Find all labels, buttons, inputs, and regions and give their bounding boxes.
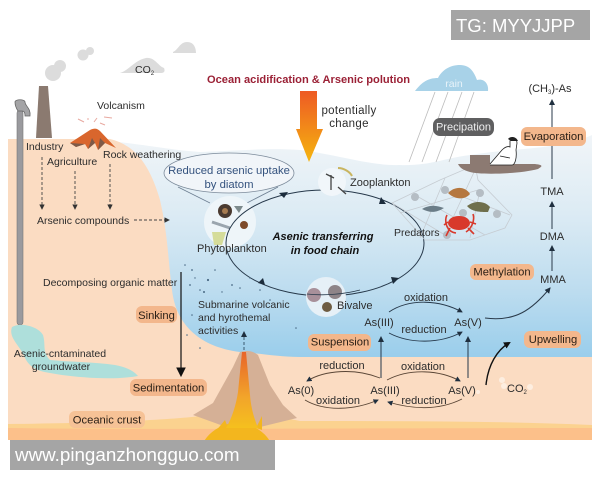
cycle centre title: in food chain xyxy=(291,245,359,257)
smoke clouds xyxy=(45,42,196,81)
CO2 label top: 2 xyxy=(151,71,155,77)
watermark top: TG: MYYJJPP xyxy=(456,15,575,36)
sediment arsenic cycle: oxidation xyxy=(401,361,445,373)
land source labels: Agriculture xyxy=(47,156,97,168)
sediment arsenic cycle: reduction xyxy=(319,360,365,372)
land source labels: Industry xyxy=(26,141,64,153)
Upwelling pill: Upwelling xyxy=(529,334,577,346)
rain cloud xyxy=(415,65,488,91)
volcano on land xyxy=(70,117,116,150)
ocean water xyxy=(100,135,592,360)
watermark top xyxy=(451,10,590,40)
sinking arrowhead xyxy=(177,368,185,376)
Sedimentation pill xyxy=(130,379,207,396)
rain lines xyxy=(409,92,474,162)
CO2 label lower: 2 xyxy=(524,390,528,396)
land source labels xyxy=(26,141,181,227)
submarine label: activities xyxy=(198,325,238,337)
diatom callout xyxy=(164,153,294,204)
methyl species: (CH xyxy=(528,83,548,95)
Precipation pill: Precipation xyxy=(436,122,491,134)
sediment arsenic cycle: As(III) xyxy=(370,385,400,397)
zooplankton icon xyxy=(318,168,352,196)
watermark bottom xyxy=(10,440,275,470)
groundwater plume xyxy=(11,325,138,378)
cycle centre title: Asenic transferring xyxy=(273,231,373,243)
Suspension pill xyxy=(308,334,371,351)
Suspension pill: Suspension xyxy=(311,336,369,348)
potentially change text: change xyxy=(329,118,369,130)
land source labels: Rock weathering xyxy=(103,149,181,161)
Zooplankton label: Zooplankton xyxy=(350,177,411,189)
orange down arrow xyxy=(296,91,323,162)
rising arrows xyxy=(381,337,509,385)
rain cloud: rain xyxy=(445,78,463,90)
Phytoplankton label: Phytoplankton xyxy=(197,243,267,255)
sediment pale smudges xyxy=(476,377,533,394)
Upwelling pill xyxy=(524,331,581,348)
Decomposing label: Decomposing organic matter xyxy=(43,277,178,289)
vent dashed arrow xyxy=(243,332,245,350)
land and sea floor xyxy=(8,139,592,440)
food chain cycle xyxy=(226,190,424,296)
sediment arsenic cycle: oxidation xyxy=(316,395,360,407)
diatom callout: by diatom xyxy=(205,179,253,191)
methyl species: DMA xyxy=(540,231,565,243)
Methylation pill xyxy=(470,264,534,280)
Oceanic crust pill: Oceanic crust xyxy=(73,414,142,426)
methyl species xyxy=(528,83,572,286)
Oceanic crust pill xyxy=(69,411,145,428)
potentially change text: potentially xyxy=(321,105,377,117)
net knots xyxy=(411,186,501,239)
sediment arsenic cycle: As(0) xyxy=(288,385,314,397)
fish and crab xyxy=(422,188,490,236)
sediment arsenic cycle: As(V) xyxy=(448,385,476,397)
land source labels: Arsenic compounds xyxy=(37,215,129,227)
CO2 label top: CO xyxy=(135,64,151,76)
diatom callout: Reduced arsenic uptake xyxy=(168,165,290,177)
submarine label: and hyrothemal xyxy=(198,312,270,324)
Evaporation pill xyxy=(521,127,586,146)
groundwater label: groundwater xyxy=(32,361,91,373)
sediment arsenic cycle: reduction xyxy=(401,395,447,407)
methyl species: TMA xyxy=(540,186,564,198)
CO2 label lower: CO xyxy=(507,383,524,395)
water arsenic cycle: oxidation xyxy=(404,292,448,304)
sinking arrow xyxy=(180,272,182,374)
methyl species: )-As xyxy=(551,83,572,95)
person in boat xyxy=(490,137,518,165)
phytoplankton icon xyxy=(204,196,256,248)
title: Ocean acidification & Arsenic polution xyxy=(207,74,410,86)
groundwater label: Asenic-cntaminated xyxy=(14,348,106,360)
net xyxy=(392,165,512,240)
Sinking pill xyxy=(136,306,177,323)
chimney xyxy=(36,86,52,138)
water arsenic cycle xyxy=(364,292,482,341)
methyl species: 3 xyxy=(548,90,552,96)
crust layers xyxy=(8,415,592,440)
dashed arrows to arsenic compounds xyxy=(42,157,169,220)
submarine label: Submarine volcanic xyxy=(198,299,290,311)
Methylation pill: Methylation xyxy=(473,266,531,278)
methyl species: MMA xyxy=(540,274,566,286)
cycle arrowheads xyxy=(258,192,399,285)
water arsenic cycle: As(V) xyxy=(454,317,482,329)
Precipation pill xyxy=(433,118,494,136)
particles xyxy=(184,264,297,349)
sediment arsenic cycle xyxy=(288,360,476,408)
watermark bottom: www.pinganzhongguo.com xyxy=(14,444,239,465)
Bivalve label: Bivalve xyxy=(337,300,372,312)
TMA chain xyxy=(485,100,552,319)
water arsenic cycle: reduction xyxy=(401,324,447,336)
bivalve icon xyxy=(306,277,360,317)
Volcanism label: Volcanism xyxy=(97,100,145,112)
Sinking pill: Sinking xyxy=(138,310,175,322)
Evaporation pill: Evaporation xyxy=(524,131,583,143)
water arsenic cycle: As(III) xyxy=(364,317,394,329)
Sedimentation pill: Sedimentation xyxy=(133,382,204,394)
submarine volcano xyxy=(193,351,297,440)
Predators label: Predators xyxy=(394,227,440,239)
pipe and tap xyxy=(15,100,30,325)
boat xyxy=(458,155,541,174)
